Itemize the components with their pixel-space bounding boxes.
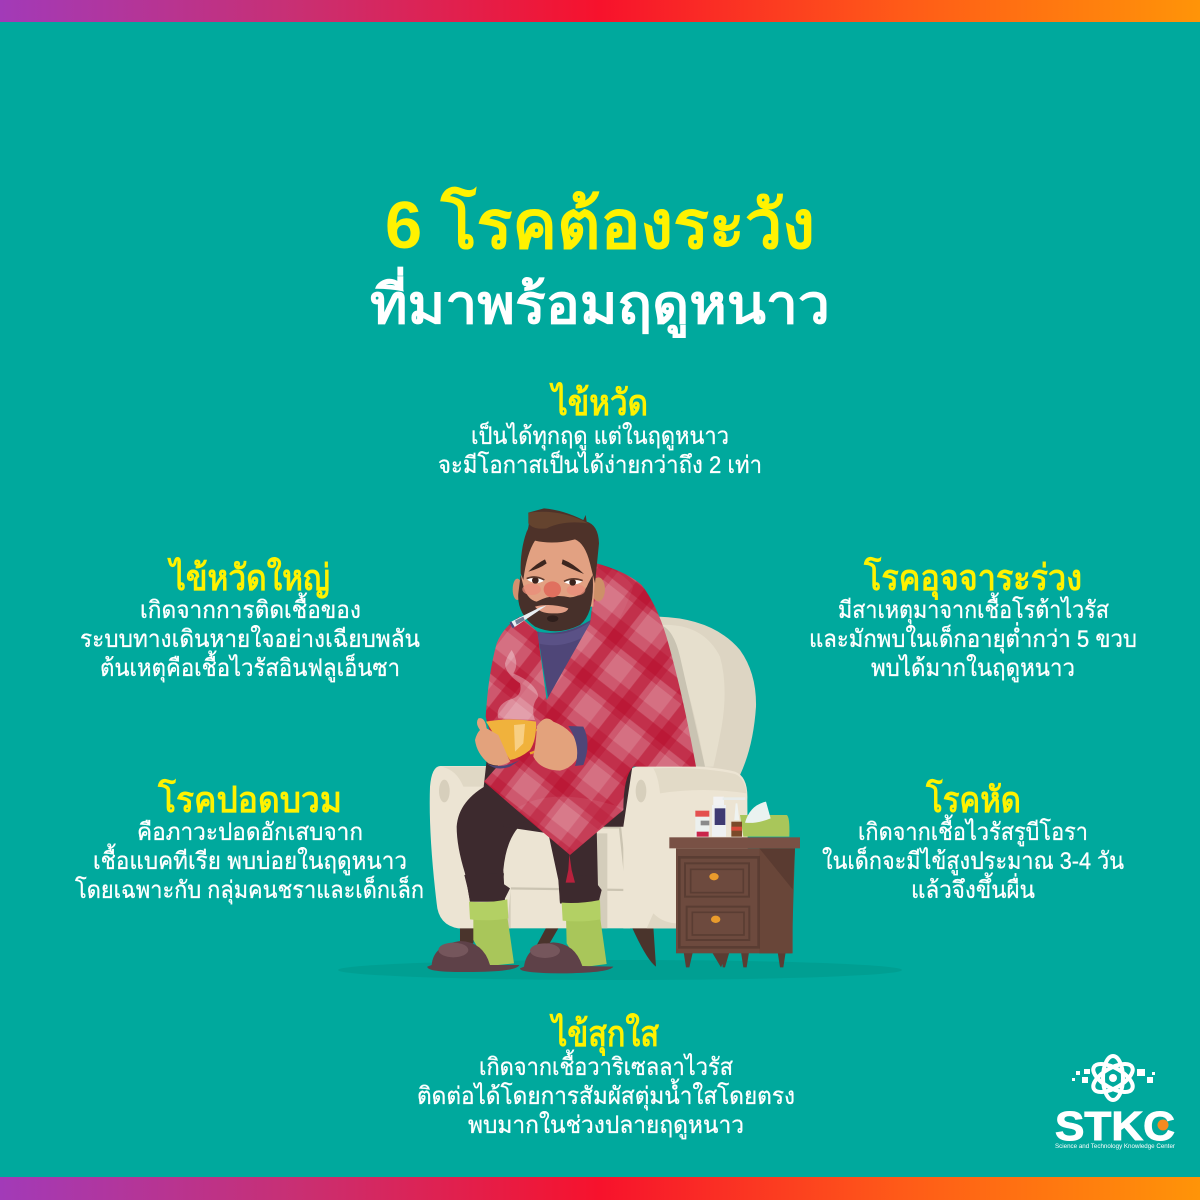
- disease: measles: แล้วจึงขึ้นผื่น: [911, 872, 1035, 904]
- disease: measles: ในเด็กจะมีไข้สูงประมาณ 3-4 วัน: [822, 846, 1124, 876]
- disease: influenza: ไข้หวัดใหญ่: [166, 556, 330, 599]
- nightstand: [669, 837, 800, 967]
- armchair: [430, 617, 756, 967]
- thermometer: [509, 605, 547, 628]
- disease: chickenpox: พบมากในช่วงปลายฤดูหนาว: [468, 1111, 744, 1140]
- disease: chickenpox: [417, 1012, 795, 1140]
- disease: diarrhea: มีสาเหตุมาจากเชื้อโรต้าไวรัส: [838, 592, 1109, 625]
- logo: STKC: Science and Technology Knowledge Center: [1055, 1144, 1175, 1150]
- bottom gradient bar: [0, 1177, 1200, 1200]
- logo: STKC: [1055, 1056, 1175, 1150]
- logo atom mark: [1072, 1056, 1155, 1100]
- legs: [457, 760, 633, 903]
- disease: pneumonia: โรคปอดบวม: [157, 778, 342, 820]
- socks: [469, 899, 607, 967]
- disease: pneumonia: เชื้อแบคทีเรีย พบบ่อยในฤดูหนาว: [93, 843, 407, 876]
- medicine and tissue box: [695, 797, 789, 837]
- disease: measles: [822, 778, 1124, 904]
- disease: pneumonia: โดยเฉพาะกับ กลุ่มคนชราและเด็กเล็ก: [75, 875, 424, 905]
- head: [513, 508, 605, 631]
- disease: measles: เกิดจากเชื้อไวรัสรูบีโอรา: [858, 814, 1088, 847]
- tassel: [566, 854, 575, 883]
- title: [370, 186, 830, 338]
- floor shadow: [338, 960, 902, 980]
- disease: diarrhea: พบได้มากในฤดูหนาว: [871, 654, 1075, 683]
- disease: diarrhea: [809, 556, 1137, 683]
- disease: common cold: จะมีโอกาสเป็นได้ง่ายกว่าถึง 2 เท่า: [438, 450, 762, 479]
- disease: pneumonia: [75, 778, 424, 905]
- cheeks and nose: [522, 584, 541, 595]
- slippers: [427, 941, 613, 973]
- disease: common cold: เป็นได้ทุกฤดู แต่ในฤดูหนาว: [471, 421, 729, 451]
- disease: chickenpox: ไข้สุกใส: [549, 1012, 659, 1057]
- plaid blanket: [484, 563, 696, 855]
- cup and hands: [475, 718, 587, 771]
- disease: influenza: ระบบทางเดินหายใจอย่างเฉียบพลัน: [80, 625, 420, 653]
- disease: diarrhea: โรคอุจจาระร่วง: [863, 556, 1082, 601]
- title: ที่มาพร้อมฤดูหนาว: [370, 266, 830, 338]
- disease: influenza: [80, 556, 420, 683]
- disease: chickenpox: ติดต่อได้โดยการสัมผัสตุ่มน้ำใสโดยตรง: [417, 1078, 795, 1111]
- logo: STKC: STKC: [1055, 1103, 1175, 1149]
- top gradient bar: [0, 0, 1200, 22]
- title: 6 โรคต้องระวัง: [385, 186, 815, 263]
- disease: diarrhea: และมักพบในเด็กอายุต่ำกว่า 5 ขวบ: [809, 622, 1137, 654]
- steam: [498, 650, 538, 720]
- disease: chickenpox: เกิดจากเชื้อวาริเซลลาไวรัส: [479, 1049, 733, 1081]
- disease: common cold: ไข้หวัด: [549, 381, 648, 423]
- illustration: sick man in armchair: [427, 508, 800, 973]
- disease: pneumonia: คือภาวะปอดอักเสบจาก: [137, 819, 363, 846]
- eyes: [527, 578, 544, 583]
- disease: common cold: [438, 381, 762, 479]
- sweater: [537, 620, 592, 700]
- disease: influenza: เกิดจากการติดเชื้อของ: [140, 592, 361, 624]
- disease: influenza: ต้นเหตุคือเชื้อไวรัสอินฟลูเอ็นซา: [100, 650, 400, 683]
- disease: measles: โรคหัด: [925, 778, 1021, 820]
